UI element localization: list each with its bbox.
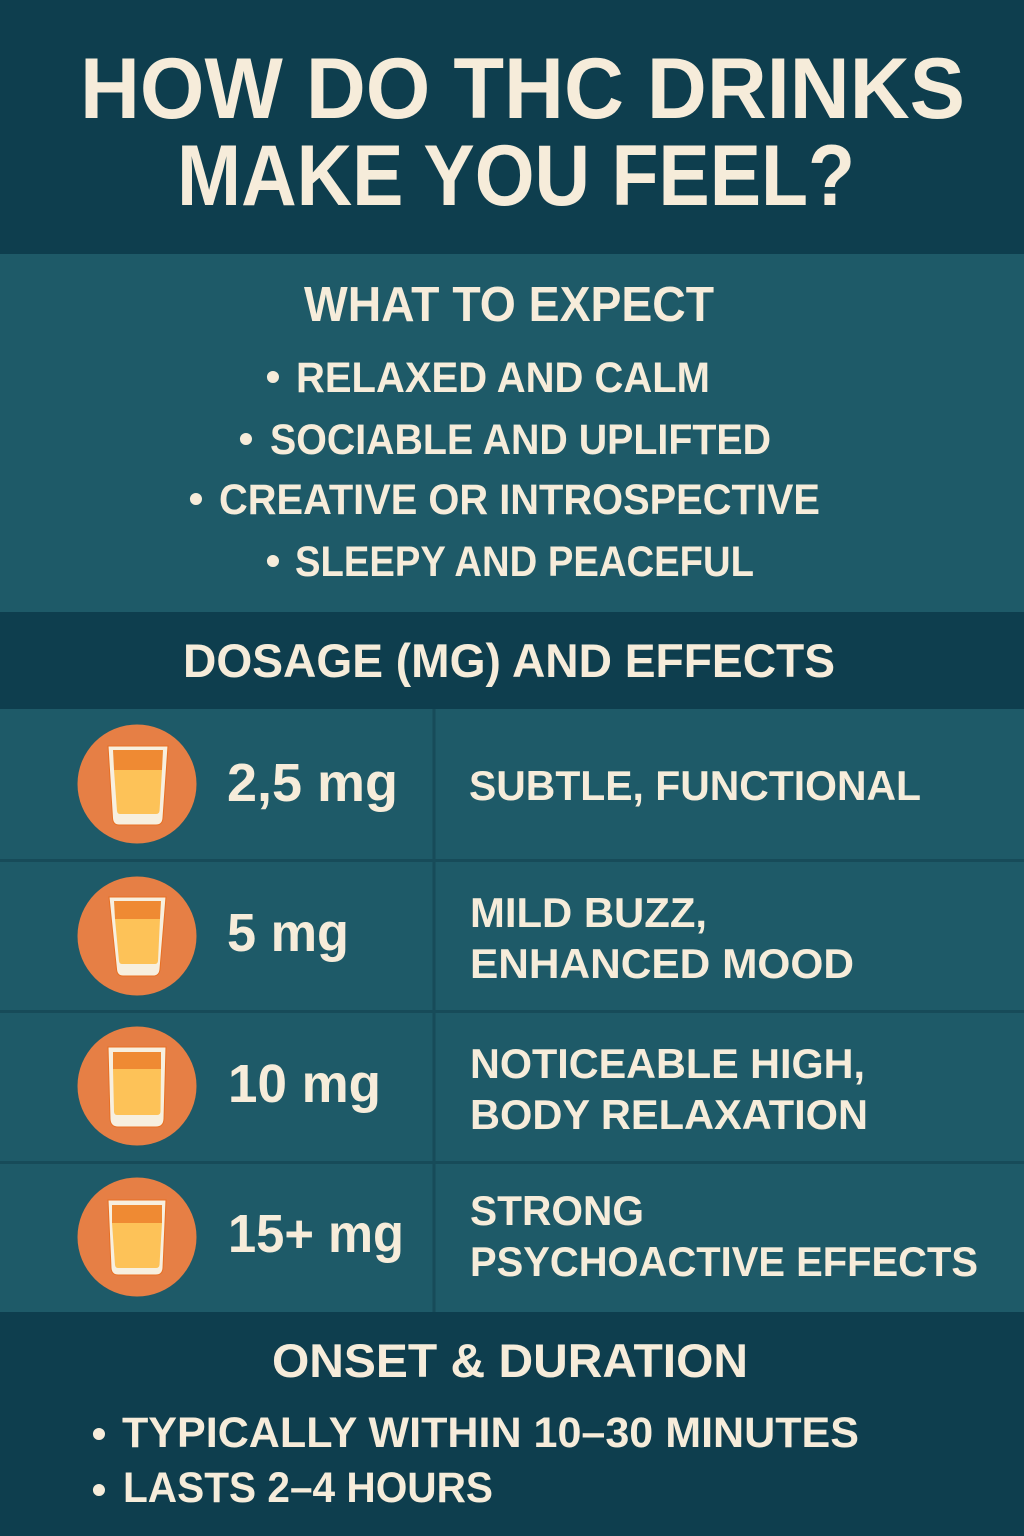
list item: relaxed and calm: •: [266, 353, 280, 400]
effect text: NOTICEABLE HIGH,: [470, 1040, 865, 1087]
list item: duration: LASTS 2–4 HOURS: [123, 1464, 493, 1512]
list item: sleepy and peaceful: •: [266, 537, 280, 584]
effect text: [470, 1040, 868, 1138]
icon: glass 15+ mg: [78, 1178, 196, 1296]
dose label: 5 mg: [227, 903, 349, 963]
row: 10 mg: [78, 1026, 868, 1146]
dose label: 2,5 mg: [227, 753, 398, 813]
dose label: 10 mg: [228, 1054, 381, 1114]
list item: relaxed and calm: RELAXED AND CALM: [296, 354, 710, 402]
list item: duration: •: [92, 1466, 106, 1513]
title line 1: HOW DO THC DRINKS: [80, 41, 965, 137]
icon: glass 10 mg: [78, 1026, 196, 1146]
panel: dosage heading band: [0, 612, 1024, 709]
icon: glass 2,5 mg: [78, 724, 196, 844]
effect text: STRONG: [470, 1187, 644, 1234]
row: 2,5 mg: [78, 724, 921, 844]
panel: dosage table: [0, 709, 1024, 1312]
list item: sleepy and peaceful: SLEEPY AND PEACEFUL: [295, 538, 754, 586]
effect text: ENHANCED MOOD: [470, 940, 854, 987]
panel: what to expect: [0, 254, 1024, 612]
effect text: MILD BUZZ,: [470, 889, 707, 936]
list item: onset time: •: [92, 1410, 106, 1457]
panel: onset and duration: [0, 1312, 1024, 1536]
list item: onset time: TYPICALLY WITHIN 10–30 MINUTES: [122, 1409, 859, 1457]
effect text: SUBTLE, FUNCTIONAL: [469, 762, 921, 809]
icon: glass 5 mg: [78, 876, 196, 996]
list item: sociable and uplifted: SOCIABLE AND UPLIFTED: [270, 416, 771, 464]
row: 5 mg: [78, 876, 854, 996]
effect text: BODY RELAXATION: [470, 1091, 868, 1138]
title line 2: MAKE YOU FEEL?: [177, 128, 855, 224]
list item: creative or introspective: CREATIVE OR INTROSPECTIVE: [219, 476, 820, 524]
panel: title header: [0, 0, 1024, 254]
list item: sociable and uplifted: •: [239, 415, 253, 462]
heading: onset and duration: ONSET & DURATION: [272, 1334, 748, 1387]
dose label: 15+ mg: [228, 1204, 404, 1264]
effect text: [470, 889, 854, 987]
effect text: [470, 1187, 978, 1285]
heading: what to expect: WHAT TO EXPECT: [304, 278, 714, 332]
row: 15+ mg: [78, 1178, 978, 1296]
heading: dosage and effects: DOSAGE (MG) AND EFFECTS: [183, 634, 835, 687]
list item: creative or introspective: •: [189, 475, 203, 522]
effect text: PSYCHOACTIVE EFFECTS: [470, 1238, 978, 1285]
